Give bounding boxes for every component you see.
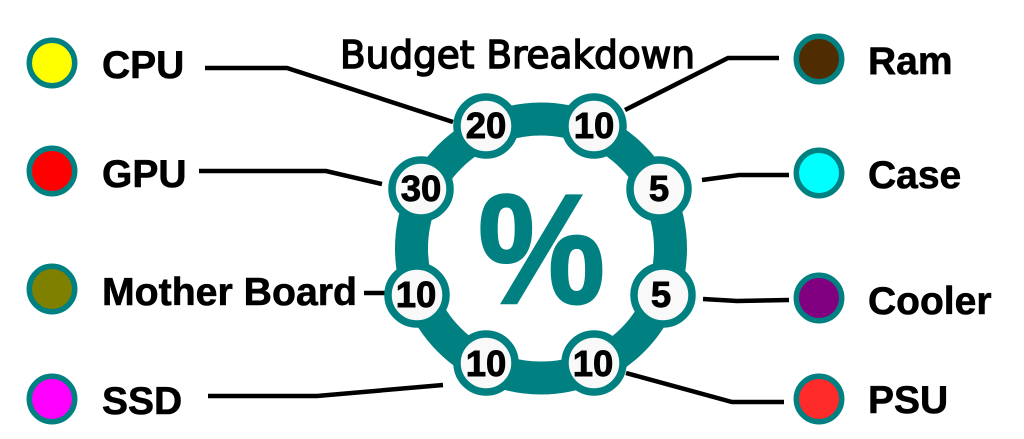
legend: Ram [796,36,953,83]
connector: PSU [626,373,784,402]
connector: GPU [199,171,382,184]
connector: SSD [208,385,443,396]
badge: Mother Board 10 [388,266,446,324]
legend: Cooler: Cooler [868,280,992,323]
legend: CPU: CPU [102,44,184,87]
legend: Ram: Ram [868,40,953,83]
badge: Mother Board 10: 10 [396,274,436,315]
connector: Ram [625,58,779,110]
legend: GPU: GPU [102,153,187,196]
title: Budget Breakdown [340,33,695,77]
legend: SSD [29,376,182,423]
badge: GPU 30 [392,160,450,218]
legend: Case [796,150,961,197]
badge: GPU 30: 30 [401,168,441,209]
badge: CPU 20 [457,97,515,155]
legend: Case: Case [868,154,961,197]
legend: GPU [29,148,187,196]
legend: SSD: SSD [102,380,182,423]
badge: SSD 10: 10 [466,343,506,384]
badge: CPU 20: 20 [466,105,506,146]
connector: Mother Board [364,291,386,295]
badge: Ram 10 [565,97,623,155]
badge: Case 5: 5 [649,168,669,209]
percent symbol: % [478,163,605,337]
legend: PSU [796,376,948,422]
badge: Cooler 5: 5 [651,274,671,315]
badge: Ram 10: 10 [574,105,614,146]
badge: SSD 10 [457,334,515,392]
ring [412,119,670,378]
legend: Mother Board: Mother Board [102,271,357,314]
badge: Case 5 [630,160,688,218]
connector: Case [702,175,789,180]
legend: Cooler [796,275,992,323]
badge: PSU 10: 10 [573,343,613,384]
legend: CPU [29,40,184,87]
badge: PSU 10 [565,334,623,392]
legend: PSU: PSU [868,379,948,422]
connector: Cooler [703,299,789,301]
connector: CPU [205,68,453,122]
legend: Mother Board [29,266,357,314]
badge: Cooler 5 [634,266,692,324]
